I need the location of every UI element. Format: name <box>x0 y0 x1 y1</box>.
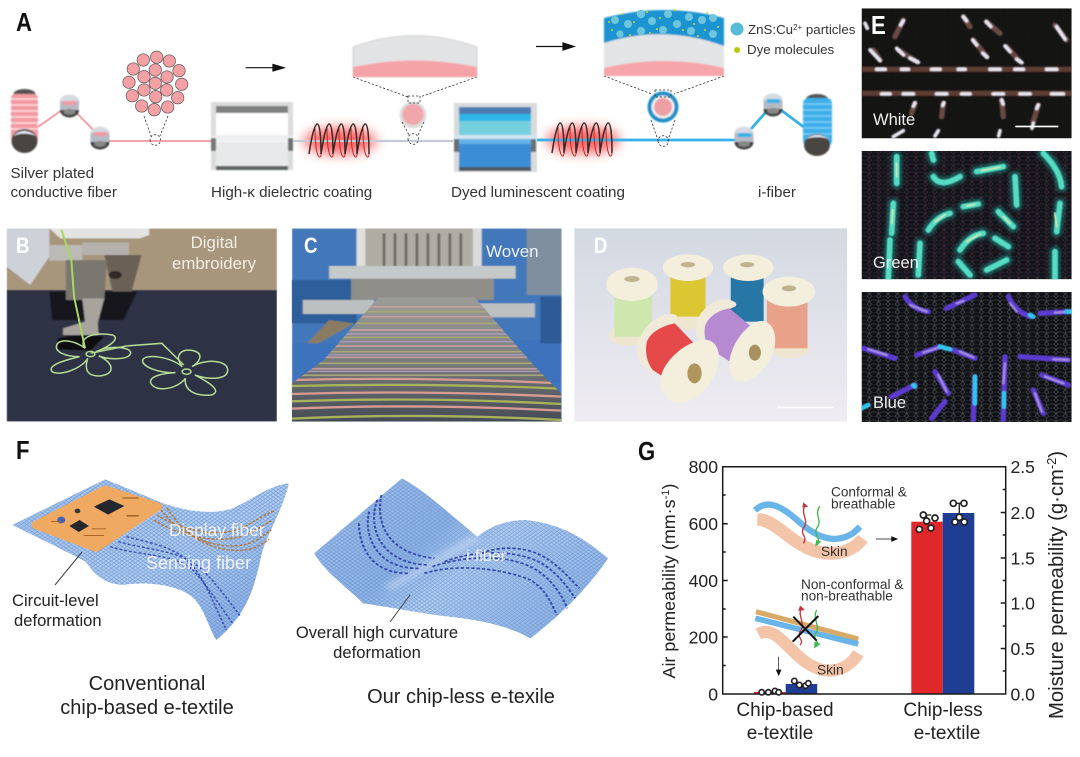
right axis title: ) <box>1045 451 1068 458</box>
blue i-fiber line <box>537 104 805 140</box>
x axis labels <box>736 700 983 744</box>
arrow to chip-less bars <box>876 537 897 541</box>
letter C: C <box>304 235 318 258</box>
letter E: E <box>871 11 886 40</box>
legend: particles and dye: 2+ <box>793 23 803 32</box>
icon: blue rollers <box>734 94 782 150</box>
pink conductive fiber line <box>38 105 212 141</box>
insets and data points <box>755 485 967 695</box>
label digital embroidery: Digital <box>191 233 237 252</box>
label sensing fiber: Sensing fiber <box>146 553 251 573</box>
embedded i-fibers <box>359 495 579 615</box>
panel letter A: A <box>16 8 32 37</box>
heater coil 1 <box>309 124 369 157</box>
label circuit-level deformation: deformation <box>14 611 102 630</box>
label woven: Woven <box>486 242 539 261</box>
heater coil glow 2 <box>547 127 619 153</box>
spool: light green <box>606 268 658 346</box>
x axis labels: Chip-less <box>903 700 983 721</box>
right axis tick labels <box>1010 457 1035 704</box>
panel C: woven textile photo <box>291 228 562 422</box>
grey coated fiber <box>293 140 453 142</box>
right axis tick labels: 0.5 <box>1010 639 1035 659</box>
dashed zoom cone 2 <box>353 77 477 144</box>
letter D: D <box>594 235 607 258</box>
panel B: digital embroidery photo <box>7 228 277 422</box>
label digital embroidery: embroidery <box>172 254 257 273</box>
photo: blue emission <box>862 292 1072 422</box>
embroidered flowers <box>51 334 228 395</box>
inset: conformal breathable: Conformal & <box>831 485 907 500</box>
x axis labels: Chip-based <box>736 700 834 721</box>
right axis title: Moisture permeability (g·cm <box>1045 466 1068 719</box>
caption: silver plated fiber: conductive fiber <box>10 184 117 201</box>
scale bar E <box>1015 126 1058 127</box>
spool: salmon <box>763 277 815 358</box>
panel D: colored fiber spools photo <box>574 228 847 422</box>
left axis tick labels: 800 <box>689 457 718 477</box>
chart axes frame and ticks <box>723 467 1006 694</box>
photo: green emission <box>862 151 1072 279</box>
spool: blue <box>723 254 774 322</box>
right axis tick labels: 1.0 <box>1010 594 1035 614</box>
arrow to chip-based bars <box>776 657 781 675</box>
dashed zoom cone 3 <box>604 76 724 146</box>
chip-less fabric <box>314 478 608 638</box>
inset: conformal breathable: breathable <box>831 496 896 511</box>
right axis tick labels: 1.5 <box>1010 548 1035 568</box>
right axis title: -2 <box>1044 458 1059 469</box>
icon: coated fiber cross-section <box>400 102 426 128</box>
label i-fiber: i-fiber <box>466 548 507 565</box>
arrow: process direction 1 <box>246 64 284 71</box>
dye coating bath <box>454 103 537 172</box>
right axis tick labels: 0.0 <box>1010 684 1035 704</box>
inset: conformal breathable <box>755 485 907 559</box>
embroidered green thread <box>61 230 85 348</box>
label high curvature deformation: deformation <box>333 643 421 662</box>
x axis labels: e-textile <box>747 723 813 744</box>
panel E: luminescent stitch photos <box>862 8 1072 422</box>
inset: non-conformal non-breathable <box>755 577 903 677</box>
caption: i-fiber: i-fiber <box>758 184 796 201</box>
caption: silver plated fiber: Silver plated <box>10 165 94 182</box>
dielectric coating bath <box>211 102 293 170</box>
scale bar D <box>777 407 834 408</box>
sensing fibers <box>110 537 241 630</box>
letter B: B <box>16 235 30 258</box>
left axis title: Air permeability (mm·s <box>659 503 679 678</box>
panel letter G: G <box>638 437 655 466</box>
left axis title: ) <box>659 484 679 489</box>
left axis tick labels: 200 <box>689 628 718 648</box>
data points chip-less <box>916 500 967 532</box>
arrow: process direction 2 <box>536 43 574 50</box>
panel F: e-textile comparison <box>12 436 608 719</box>
right axis tick labels: 2.5 <box>1010 457 1035 477</box>
caption: luminescent coating: Dyed luminescent coating <box>451 184 625 201</box>
heading conventional: chip-based e-textile <box>60 697 234 719</box>
photo: white emission <box>862 8 1072 138</box>
spool: purple <box>696 299 775 382</box>
bars <box>754 513 974 694</box>
legend: particles and dye: Dye molecules <box>747 42 835 57</box>
label blue: Blue <box>873 394 906 412</box>
label circuit-level deformation: Circuit-level <box>12 591 99 610</box>
inset: non-conformal non-breathable: Non-conformal & <box>801 577 903 592</box>
left axis tick labels: 400 <box>689 571 718 591</box>
icon: pink rollers <box>60 94 110 150</box>
woven striped fabric <box>292 297 562 422</box>
heater coil glow 1 <box>304 128 376 154</box>
data points chip-based <box>759 678 811 695</box>
leader line circuit <box>55 552 82 585</box>
leader line curvature <box>390 595 410 622</box>
right axis tick labels: 2.0 <box>1010 503 1035 523</box>
x axis labels: e-textile <box>914 723 980 744</box>
lens magnified dielectric layer <box>353 36 477 77</box>
inset: conformal breathable: Skin <box>821 544 848 559</box>
left axis title: -1 <box>660 489 672 499</box>
label high curvature deformation: Overall high curvature <box>296 623 458 642</box>
dashed zoom cone <box>144 116 168 145</box>
circuit board with chips <box>37 490 157 547</box>
legend: particles and dye: ZnS:Cu <box>748 22 793 37</box>
icon: pink source spool <box>11 89 38 153</box>
spool: red <box>637 314 719 403</box>
label green: Green <box>873 254 919 272</box>
icon: fiber bundle cross-section <box>123 51 188 116</box>
inset: non-conformal non-breathable: non-breathable <box>801 589 893 604</box>
display fibers <box>154 508 275 550</box>
heading chip-less: Our chip-less e-texile <box>367 686 555 708</box>
caption: dielectric coating: High-κ dielectric coating <box>211 184 372 201</box>
panel G: permeability bar chart <box>638 437 1068 744</box>
panel letter F: F <box>16 436 29 465</box>
icon: i-fiber cross-section <box>648 92 678 122</box>
conventional chip-based fabric <box>12 479 289 640</box>
spool: yellow <box>663 254 713 330</box>
panel A: fiber fabrication process <box>10 8 856 201</box>
left axis tick labels: 600 <box>689 514 718 534</box>
inset: non-conformal non-breathable: Skin <box>817 662 844 677</box>
legend: particles and dye <box>730 22 856 57</box>
lens magnified luminescent layer <box>604 9 724 76</box>
heading conventional: Conventional <box>89 673 205 695</box>
legend: particles and dye: particles <box>802 22 856 37</box>
left axis tick labels: 0 <box>708 684 718 704</box>
label display fiber: Display fiber <box>169 520 265 540</box>
soft fabric crease highlight <box>388 537 477 588</box>
label white: White <box>873 111 915 129</box>
heater coil 2 <box>552 123 612 156</box>
icon: blue i-fiber spool <box>803 94 832 156</box>
left axis tick labels <box>689 457 718 704</box>
